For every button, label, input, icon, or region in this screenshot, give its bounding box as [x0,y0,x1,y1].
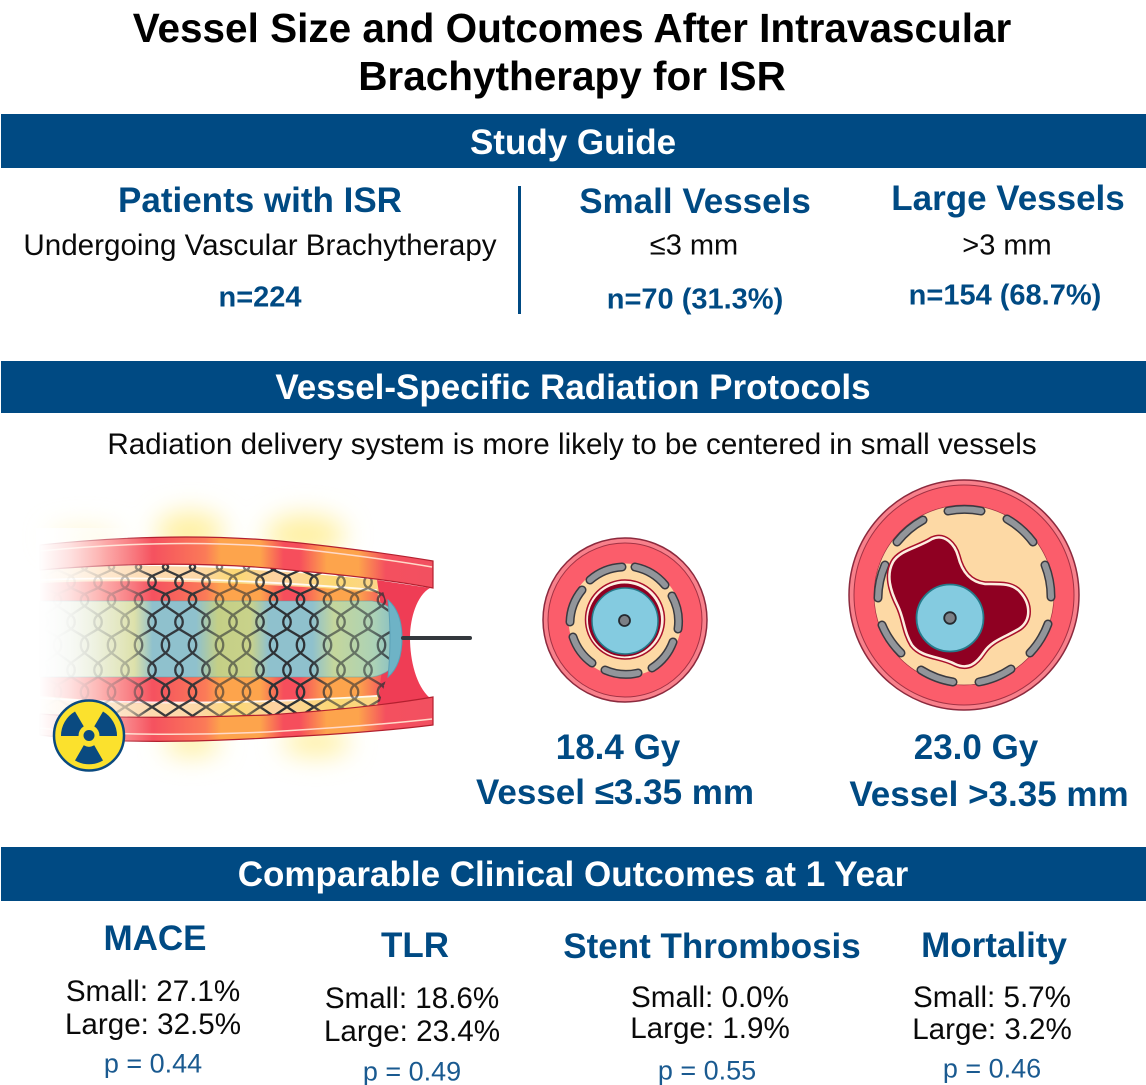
label: large vessel dose: 23.0 Gy [914,728,1038,767]
section band: radiation protocols [1,361,1146,413]
data: TLR rates: Small: 18.6% [325,982,499,1015]
heading: large vessels: Large Vessels [891,179,1125,218]
neointima [586,580,664,659]
label: small vessel threshold: Vessel ≤3.35 mm [476,773,754,812]
small vessel cross-section [543,538,707,702]
heading: patients with ISR: Patients with ISR [118,181,402,220]
plaque area [568,564,682,676]
heading: radiation protocols: Vessel-Specific Radiation Protocols [275,368,871,407]
text: large vessel size: >3 mm [962,229,1052,261]
heading: MACE: MACE [103,919,207,958]
data: stent thrombosis rates: Small: 0.0% [631,981,789,1014]
catheter balloon [916,584,984,652]
heading: mortality: Mortality [921,926,1067,965]
catheter end cap [377,580,430,707]
data: stent thrombosis rates [630,981,790,1045]
stat: small vessel patients: n=70 (31.3%) [607,283,783,315]
glow: radiation halos [49,512,350,756]
data: mortality rates [912,981,1072,1046]
section band: study guide [1,114,1146,168]
heading: study guide: Study Guide [470,123,676,162]
wire [619,615,630,626]
guide wire [403,636,470,640]
data: stent thrombosis rates: Large: 1.9% [630,1012,790,1045]
title: Brachytherapy for ISR [358,53,786,99]
illustrations layer [43,479,1080,772]
data: MACE rates: Small: 27.1% [66,975,240,1008]
left fade [36,528,152,748]
data: mortality rates: Large: 3.2% [912,1013,1072,1046]
large vessel cross-section [849,480,1079,710]
catheter tip [388,600,402,677]
top vessel wall [40,537,433,588]
balloon catheter [40,601,402,677]
title: Vessel Size and Outcomes After Intravascular [133,5,1011,51]
outer wall [543,538,707,702]
section band: clinical outcomes [1,847,1146,901]
label: large vessel threshold: Vessel >3.35 mm [849,775,1129,814]
p value: stent thrombosis: p = 0.55 [658,1055,756,1085]
stent struts [878,509,1051,682]
label: small vessel dose: 18.4 Gy [556,728,680,767]
neointimal hyperplasia [889,537,1028,666]
stat: total patients: n=224 [218,281,302,313]
text: radiation delivery statement: Radiation delivery system is more likely to be centered in small vessels [107,428,1037,461]
catheter balloon [592,588,658,654]
wire [944,612,956,624]
vessel interior: red layers [40,581,392,703]
vessel with stent and radiation glow [30,512,470,756]
data: MACE rates [65,975,241,1041]
stent mesh [70,564,390,717]
vessel interior: plaque band [40,566,390,718]
heading: TLR: TLR [381,926,449,965]
data: TLR rates [324,982,500,1048]
plaque area [874,505,1054,685]
heading: stent thrombosis: Stent Thrombosis [563,927,861,966]
heading: small vessels: Small Vessels [579,182,811,221]
p value: mortality: p = 0.46 [943,1053,1041,1083]
text: small vessel size: ≤3 mm [650,229,738,261]
bottom vessel wall [40,697,433,741]
data: TLR rates: Large: 23.4% [324,1015,500,1048]
data: mortality rates: Small: 5.7% [913,981,1071,1014]
p value: MACE: p = 0.44 [104,1048,202,1078]
text: undergoing vascular brachytherapy: Undergoing Vascular Brachytherapy [23,229,497,262]
heading: clinical outcomes: Comparable Clinical Outcomes at 1 Year [238,855,908,894]
stat: large vessel patients: n=154 (68.7%) [909,279,1101,311]
divider line [518,186,521,314]
outer wall [849,480,1079,710]
data: MACE rates: Large: 32.5% [65,1008,241,1041]
icon: radiation symbol [54,700,124,770]
title [133,5,1011,99]
stent struts [570,567,679,674]
